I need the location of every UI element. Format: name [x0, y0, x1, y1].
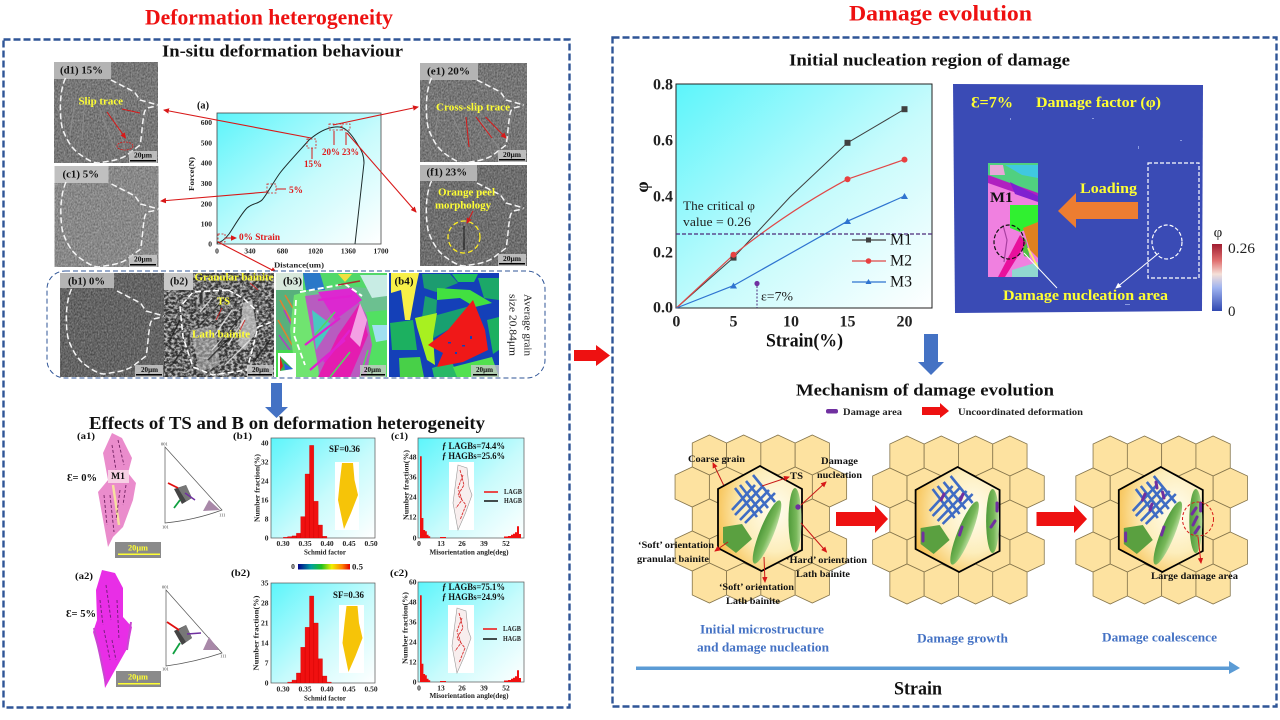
- caption: stage 2: Damage growth: [917, 630, 1009, 646]
- histogram c2 misorientation: LAGB: [503, 625, 521, 633]
- histogram c1 misorientation: Number fraction(%): [402, 449, 410, 520]
- histogram c1 misorientation: 0: [413, 534, 417, 542]
- micrograph e1 20%: [420, 63, 527, 163]
- grain size note: Average grain: [522, 294, 532, 357]
- force-distance chart (a): 100: [201, 220, 212, 228]
- line chart: damage factor vs strain: 0.0: [653, 300, 673, 316]
- stage 1: initial microstructure and damage nucleation: nucleation: [817, 471, 863, 481]
- histogram b1 Schmid factor: Number fraction(%): [252, 453, 262, 522]
- line chart: damage factor vs strain: ε=7%: [761, 288, 793, 304]
- line chart: damage factor vs strain: φ: [632, 181, 652, 193]
- line chart: damage factor vs strain: 0.2: [653, 244, 673, 262]
- force-distance chart (a): 5%: [289, 186, 303, 196]
- histogram b2 Schmid factor: 0.35: [298, 684, 312, 694]
- force-distance chart (a): 1700: [374, 246, 389, 256]
- histogram c2 misorientation: 48: [409, 598, 417, 606]
- histogram b2 Schmid factor: 0.45: [342, 684, 356, 694]
- micrograph e1 20%: 20μm: [503, 151, 521, 159]
- force-distance chart (a): Distance(um): [274, 260, 325, 270]
- histogram c2 misorientation: 0: [417, 684, 421, 692]
- legend M1 M2 M3: M1: [890, 232, 912, 248]
- EBSD inset M1: M1: [990, 190, 1013, 206]
- force-distance chart (a): 200: [201, 200, 212, 208]
- inverse pole figure a2: 101: [162, 666, 169, 672]
- histogram b1 Schmid factor: 40: [261, 438, 269, 448]
- arrow: strain axis: [636, 661, 1240, 674]
- damage factor map: Ɛ=7%: [971, 94, 1013, 112]
- arrow: stage 1 to stage 2: [836, 505, 888, 533]
- panel: damage evolution: [612, 38, 1276, 706]
- EBSD map b4: (b4): [394, 276, 414, 288]
- micrograph f1 23%: Orange peel: [438, 188, 495, 198]
- histogram c2 misorientation: 60: [409, 578, 417, 586]
- histogram b2 Schmid factor: 7: [265, 658, 269, 668]
- histogram b1 Schmid factor: 0.45: [342, 539, 356, 548]
- grain a1 at 0% strain: Ɛ= 0%: [67, 472, 97, 484]
- histogram b2 Schmid factor: 0: [265, 678, 269, 688]
- stage 1: initial microstructure and damage nucleation: Coarse grain: [688, 455, 746, 465]
- micrograph b1 0%: [60, 273, 164, 377]
- colour scale φ: 0.26: [1228, 241, 1256, 257]
- histogram c2 misorientation: ƒ LAGBs=75.1%: [442, 582, 505, 592]
- grain a2 at 5% strain: 20μm: [128, 672, 148, 682]
- histogram b1 Schmid factor: 24: [261, 476, 269, 486]
- legend: damage area and uncoordinated deformation: Uncoordinated deformation: [958, 407, 1083, 417]
- force-distance chart (a): [187, 100, 389, 270]
- histogram c1 misorientation: 39: [480, 539, 488, 548]
- grain size note: [506, 294, 532, 357]
- stage 1: initial microstructure and damage nucleation: [637, 435, 868, 607]
- line chart: damage factor vs strain: 0: [672, 314, 680, 330]
- force-distance chart (a): 0% Strain: [239, 233, 281, 243]
- legend M1 M2 M3: [852, 232, 912, 290]
- micrograph f1 23%: (f1) 23%: [426, 168, 467, 178]
- histogram c2 misorientation: (c2): [390, 568, 408, 579]
- histogram b2 Schmid factor: 14: [261, 638, 269, 648]
- micrograph f1 23%: morphology: [435, 200, 491, 212]
- caption: stage 1: and damage nucleation: [697, 640, 830, 654]
- stage 1: initial microstructure and damage nucleation: ‘Hard’ orientation: [786, 555, 868, 566]
- damage factor map: Damage factor (φ): [1036, 95, 1161, 111]
- heading: in-situ deformation behaviour: In-situ deformation behaviour: [162, 42, 403, 60]
- micrograph b1 0%: 20μm: [141, 366, 158, 374]
- micrograph b1 0%: (b1) 0%: [68, 276, 105, 288]
- histogram c2 misorientation: 13: [437, 684, 445, 692]
- histogram b1 Schmid factor: 0.30: [276, 539, 290, 548]
- force-distance chart (a): 0: [208, 240, 212, 248]
- stage 2: damage growth: [873, 436, 1044, 604]
- histogram c2 misorientation: [390, 568, 524, 700]
- arrows from curve to micrographs: [161, 107, 418, 272]
- histogram c1 misorientation: Misorientation angle(deg): [430, 548, 509, 556]
- micrograph b2 lath and granular bainite: TS: [217, 296, 230, 308]
- EBSD inset M1: [988, 163, 1038, 277]
- stage 1: initial microstructure and damage nucleation: ‘Soft’ orientation: [719, 582, 795, 593]
- icon: IPF colour key: [278, 353, 296, 377]
- line chart: damage factor vs strain: 20: [896, 314, 912, 330]
- colour bar 0 to 0.5: 0: [291, 562, 295, 571]
- force-distance chart (a): 500: [201, 138, 212, 148]
- histogram c2 misorientation: 39: [480, 684, 488, 692]
- micrograph b2 lath and granular bainite: 20μm: [252, 366, 269, 374]
- arrow: loading: [1058, 193, 1138, 228]
- histogram c2 misorientation: ƒ HAGBs=24.9%: [442, 592, 505, 602]
- arrow: down to mechanism: [918, 334, 944, 375]
- grain size note: size 20.84μm: [506, 294, 518, 356]
- colour bar 0 to 0.5: 0.5: [352, 562, 363, 572]
- heading: effects of TS and B: Effects of TS and B on deformation heterogeneity: [89, 413, 485, 433]
- line chart: damage factor vs strain: 0.4: [653, 188, 673, 206]
- histogram c1 misorientation: 36: [409, 472, 417, 482]
- line chart: damage factor vs strain: value = 0.26: [683, 215, 751, 229]
- inverse pole figure a2: 001: [162, 584, 169, 590]
- line chart: damage factor vs strain: 0.8: [653, 76, 673, 94]
- histogram c2 misorientation: Misorientation angle(deg): [430, 691, 509, 700]
- histogram b2 Schmid factor: Number fraction(%): [252, 595, 260, 670]
- damage factor map: Damage nucleation area: [1003, 288, 1169, 304]
- force-distance chart (a): (a): [197, 100, 209, 112]
- micrograph c1 5%: (c1) 5%: [62, 170, 99, 180]
- histogram b1 Schmid factor: 0: [265, 534, 269, 542]
- micrograph d1 15%: 20μm: [134, 152, 152, 160]
- micrograph c1 5%: [54, 166, 158, 267]
- histogram b1 Schmid factor: [233, 431, 378, 556]
- label: strain: Strain: [894, 678, 942, 700]
- micrograph b2 lath and granular bainite: [164, 272, 274, 377]
- EBSD map b4: [389, 273, 499, 377]
- histogram b1 Schmid factor: 16: [261, 496, 269, 504]
- force-distance chart (a): 15%: [304, 160, 322, 170]
- histogram b2 Schmid factor: 0.50: [364, 684, 378, 694]
- EBSD map b4: 20μm: [476, 366, 493, 374]
- histogram b2 Schmid factor: 28: [261, 598, 269, 608]
- histogram b2 Schmid factor: SF=0.36: [333, 590, 364, 600]
- force-distance chart (a): 0: [215, 246, 219, 256]
- micrograph c1 5%: 20μm: [134, 256, 152, 264]
- force-distance chart (a): 680: [277, 246, 288, 256]
- histogram b2 Schmid factor: 0.30: [276, 684, 290, 694]
- histogram c2 misorientation: HAGB: [503, 635, 521, 643]
- histogram c1 misorientation: 0: [417, 539, 421, 548]
- grain a1 at 0% strain: (a1): [77, 431, 95, 442]
- force-distance chart (a): 340: [244, 246, 256, 256]
- histogram c2 misorientation: 12: [409, 658, 417, 666]
- micrograph b2 lath and granular bainite: (b2): [170, 276, 188, 288]
- histogram c2 misorientation: 52: [502, 684, 510, 692]
- initial microstructure row: [47, 271, 545, 378]
- micrograph e1 20%: Cross-slip trace: [436, 102, 511, 114]
- micrograph f1 23%: 20μm: [503, 255, 521, 263]
- arrow: stage 2 to stage 3: [1036, 505, 1087, 533]
- colour bar 0 to 0.5: [291, 562, 363, 572]
- histogram b2 Schmid factor: [231, 568, 378, 702]
- grain a1 at 0% strain: 20μm: [128, 544, 148, 552]
- line chart: damage factor vs strain: 10: [783, 314, 799, 330]
- arrow: between panels: [574, 345, 610, 366]
- histogram b2 Schmid factor: 21: [261, 618, 269, 628]
- stage 1: initial microstructure and damage nucleation: Damage: [821, 457, 858, 467]
- arrow: down to effects section: [265, 383, 288, 418]
- grain a2 at 5% strain: [66, 570, 161, 688]
- legend M1 M2 M3: M2: [890, 252, 912, 270]
- grain a2 at 5% strain: Ɛ= 5%: [66, 608, 96, 620]
- stage 3: damage coalescence: Large damage area: [1151, 572, 1238, 582]
- micrograph b2 lath and granular bainite: Lath bainite: [192, 330, 251, 340]
- histogram b2 Schmid factor: 0.40: [320, 684, 334, 694]
- histogram c1 misorientation: ƒ LAGBs=74.4%: [442, 441, 505, 451]
- micrograph d1 15%: (d1) 15%: [60, 66, 103, 76]
- panel: deformation heterogeneity: [4, 40, 570, 708]
- force-distance chart (a): 300: [201, 179, 212, 188]
- histogram c1 misorientation: 12: [409, 512, 417, 522]
- micrograph d1 15%: [54, 62, 158, 163]
- line chart: damage factor vs strain: 0.6: [653, 132, 673, 150]
- histogram c1 misorientation: [391, 431, 524, 556]
- histogram b1 Schmid factor: 0.40: [320, 539, 334, 548]
- stage 1: initial microstructure and damage nucleation: granular bainite: [637, 555, 709, 565]
- stage 1: initial microstructure and damage nucleation: Lath bainite: [796, 570, 850, 580]
- inverse pole figure a2: [162, 584, 226, 672]
- inverse pole figure a1: 101: [162, 524, 169, 530]
- histogram c1 misorientation: (c1): [391, 431, 408, 442]
- line chart: damage factor vs strain: The critical φ: [683, 199, 755, 213]
- histogram c2 misorientation: 0: [413, 678, 417, 686]
- EBSD map b3: 20μm: [364, 366, 381, 374]
- histogram c1 misorientation: 13: [437, 539, 445, 548]
- inverse pole figure a1: 111: [219, 512, 225, 518]
- histogram c2 misorientation: 26: [458, 684, 466, 692]
- force-distance chart (a): 600: [201, 118, 212, 127]
- legend: damage area and uncoordinated deformation: Damage area: [843, 407, 903, 417]
- stage 1: initial microstructure and damage nucleation: TS: [790, 472, 803, 482]
- grain a1 at 0% strain: [67, 431, 161, 558]
- histogram c1 misorientation: 24: [409, 492, 417, 502]
- legend: damage area and uncoordinated deformation: [826, 403, 1083, 418]
- histogram c2 misorientation: 36: [409, 618, 417, 626]
- histogram b1 Schmid factor: 8: [265, 514, 269, 524]
- force-distance chart (a): Force(N): [187, 156, 196, 191]
- caption: stage 3: Damage coalescence: [1102, 630, 1217, 644]
- histogram c1 misorientation: 48: [409, 452, 417, 462]
- force-distance chart (a): 23%: [342, 148, 359, 158]
- histogram c2 misorientation: 24: [409, 638, 417, 646]
- EBSD map b3: (b3): [283, 276, 302, 288]
- inverse pole figure a1: [161, 442, 225, 530]
- stage 3: damage coalescence: [1076, 436, 1247, 604]
- force-distance chart (a): 400: [201, 158, 212, 168]
- histogram b2 Schmid factor: 35: [261, 578, 269, 588]
- histogram b1 Schmid factor: SF=0.36: [329, 444, 360, 454]
- histogram c1 misorientation: HAGB: [504, 497, 522, 505]
- heading: initial nucleation region: Initial nucleation region of damage: [789, 50, 1070, 70]
- histogram b1 Schmid factor: 0.50: [364, 539, 378, 548]
- colour scale φ: 0: [1228, 304, 1236, 320]
- colour scale φ: [1212, 225, 1256, 320]
- micrograph e1 20%: (e1) 20%: [427, 66, 470, 78]
- histogram c2 misorientation: Number fraction(%): [400, 591, 410, 664]
- histogram b1 Schmid factor: Schmid factor: [304, 548, 347, 556]
- force-distance chart (a): 1020: [308, 246, 323, 256]
- micrograph f1 23%: [420, 165, 527, 266]
- grain a1 at 0% strain: M1: [111, 472, 125, 482]
- micrograph d1 15%: Slip trace: [78, 96, 124, 108]
- histogram b1 Schmid factor: 0.35: [298, 539, 312, 548]
- damage factor map: [953, 84, 1203, 313]
- line chart: damage factor vs strain: Strain(%): [766, 330, 843, 352]
- stage 1: initial microstructure and damage nucleation: Lath bainite: [726, 597, 780, 607]
- histogram c1 misorientation: 52: [502, 539, 510, 548]
- histogram c1 misorientation: 26: [458, 539, 466, 548]
- histogram b2 Schmid factor: (b2): [231, 568, 250, 579]
- colour scale φ: φ: [1214, 225, 1223, 241]
- micrograph b2 lath and granular bainite: Granular bainite: [194, 272, 274, 284]
- grain a2 at 5% strain: (a2): [75, 571, 93, 582]
- line chart: damage factor vs strain: 5: [730, 314, 738, 330]
- histogram c1 misorientation: LAGB: [504, 488, 522, 496]
- stage 1: initial microstructure and damage nucleation: ‘Soft’ orientation: [638, 540, 715, 551]
- line chart: damage factor vs strain: [632, 76, 932, 352]
- histogram c1 misorientation: ƒ HAGBs=25.6%: [442, 451, 505, 461]
- heading: Deformation heterogeneity: Deformation heterogeneity: [145, 4, 393, 30]
- heading: mechanism of damage evolution: Mechanism of damage evolution: [796, 380, 1055, 400]
- line chart: damage factor vs strain: 15: [840, 314, 856, 330]
- legend M1 M2 M3: M3: [890, 274, 912, 290]
- force-distance chart (a): 1360: [341, 246, 356, 256]
- heading: Damage evolution: Damage evolution: [849, 0, 1032, 26]
- caption: stage 1: [697, 622, 830, 654]
- histogram b1 Schmid factor: 32: [261, 458, 269, 466]
- inverse pole figure a2: 111: [220, 654, 226, 658]
- EBSD map b3: [276, 273, 387, 377]
- caption: stage 1: Initial microstructure: [700, 622, 824, 636]
- histogram b1 Schmid factor: (b1): [233, 431, 252, 442]
- force-distance chart (a): 20%: [322, 148, 340, 158]
- inverse pole figure a1: 001: [161, 442, 168, 446]
- histogram b2 Schmid factor: Schmid factor: [304, 694, 347, 702]
- damage factor map: Loading: [1080, 181, 1138, 197]
